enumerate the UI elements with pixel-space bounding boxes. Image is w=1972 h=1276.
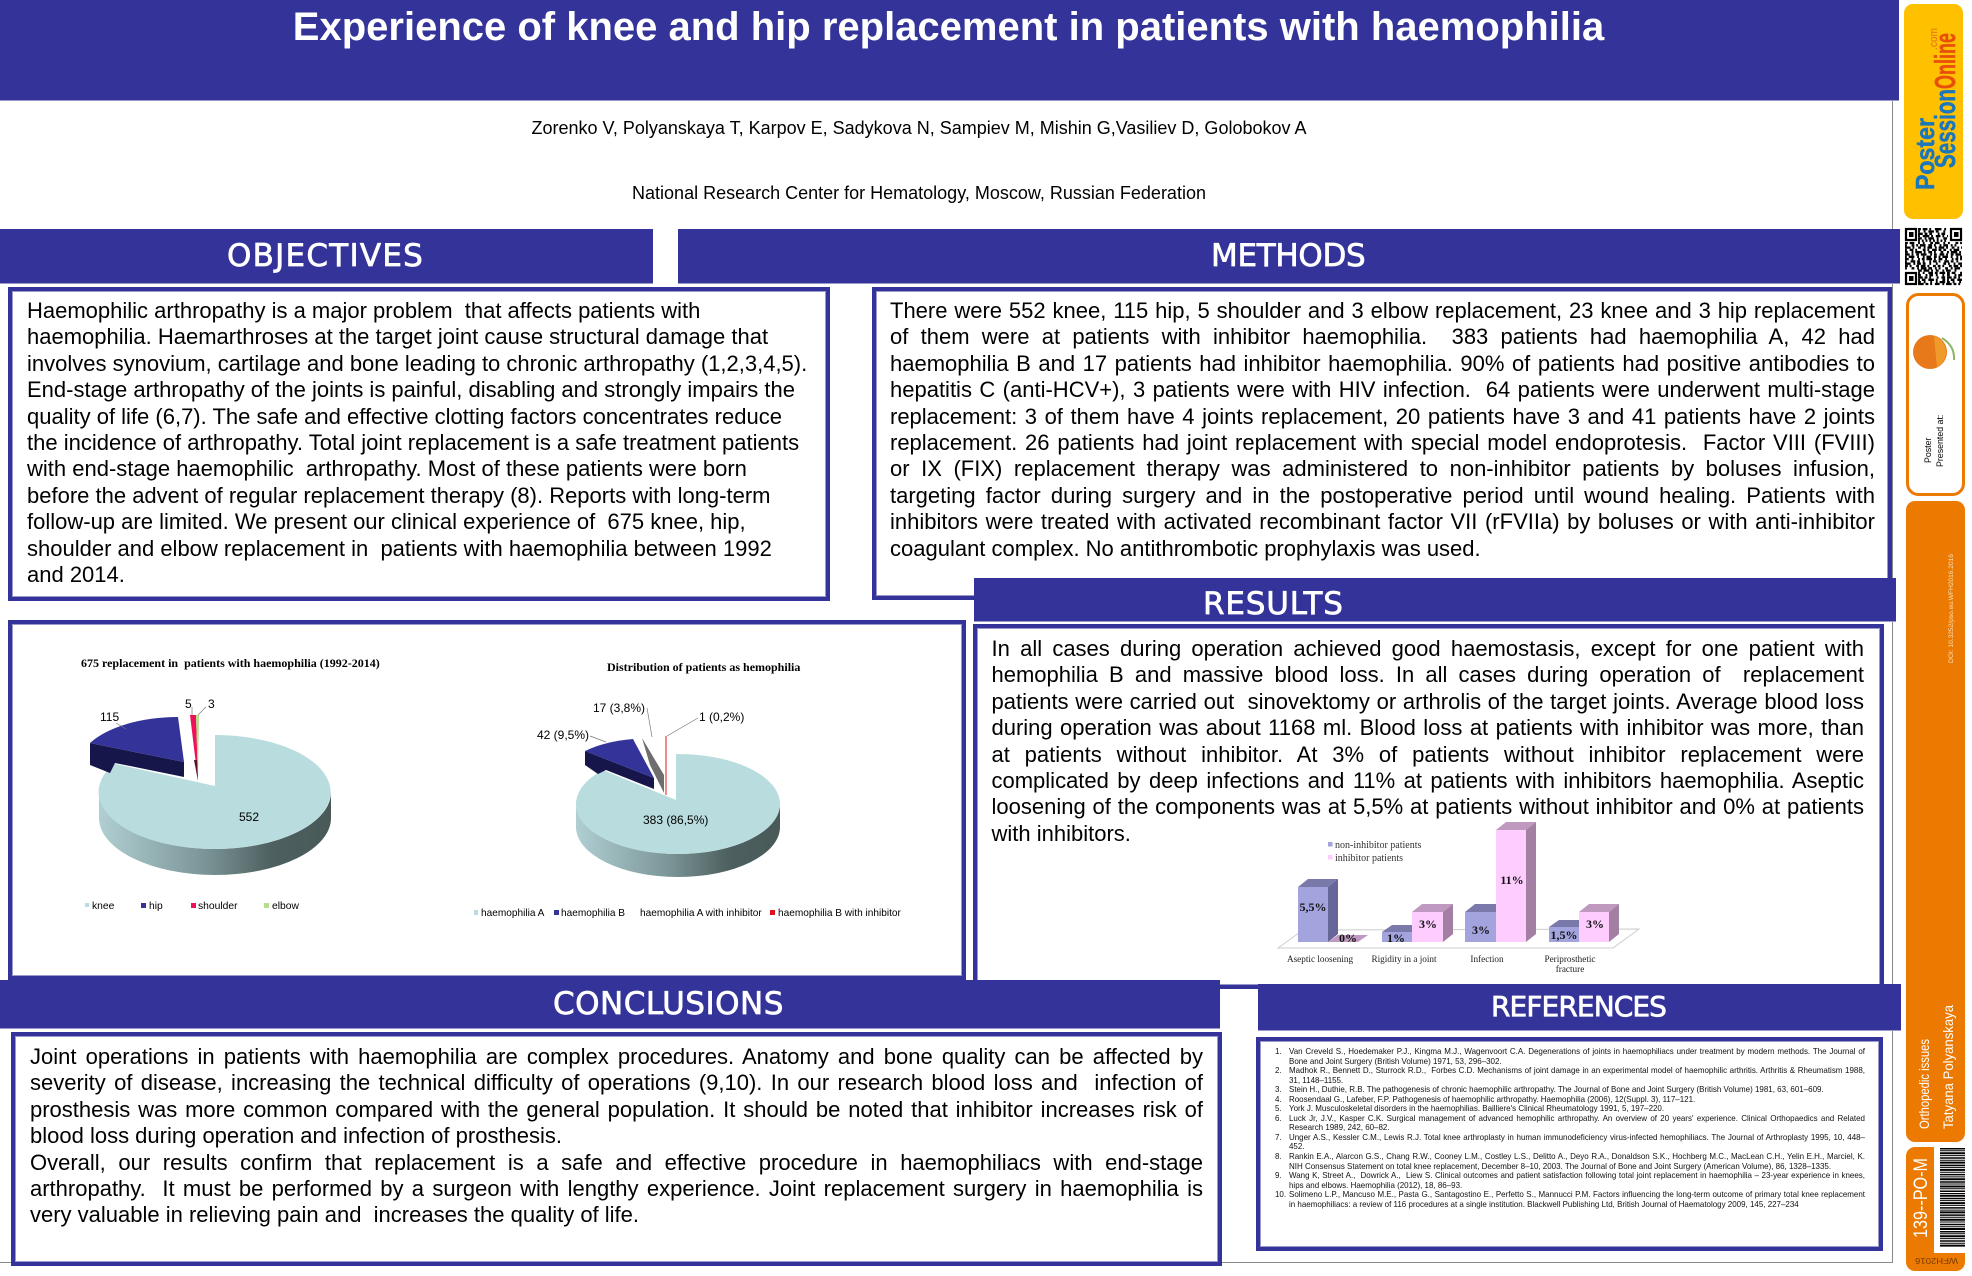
text: references: hips and elbows. Haemophilia (2012), 18, 86–93. [1289,1181,1462,1190]
bar chart: complications: inhibitor patients [1335,853,1403,864]
text: references: 452. [1289,1142,1305,1151]
pie chart: replacements: 552 [239,810,259,824]
sidebar: poster id and barcode: WFH2016 [1915,1256,1958,1266]
pie chart: replacements: 675 replacement in patients with haemophilia (1992-2014) [81,656,380,670]
panel: objectives [8,287,830,601]
text: 1. [1275,1047,1282,1056]
bar chart: complications: Rigidity in a joint [1371,954,1437,964]
text: methods: hepatitis C (anti-HCV+), 3 patients were with HIV infection. 64 patients were underwent multi-stage [890,377,1875,402]
pie chart: distribution: haemophilia B with inhibitor [778,908,902,919]
text: references: Bone and Joint Surgery (British Volume) 1971, 53, 296–302. [1289,1057,1502,1066]
heading: conclusions: CONCLUSIONS [553,986,784,1022]
heading bar: objectives [0,229,653,283]
sidebar: poster session online logo: Session [1930,89,1962,168]
bar chart: complications: Periprosthetic [1544,954,1596,964]
bar chart: complications: Infection [1470,954,1504,964]
bar chart: complications: 1,5% [1550,928,1578,942]
text: 3. [1275,1085,1282,1094]
pie chart: distribution: 17 (3,8%) [593,701,645,715]
text: conclusions [30,1044,1204,1227]
text: conclusions: arthropathy. It must be performed by a surgeon with lengthy experience. Joint replacement surgery in haemophilia is [30,1176,1203,1201]
heading bar: results [974,578,1896,621]
text: references: Research 1989, 242, 60–82. [1289,1123,1390,1132]
text: references: Van Creveld S., Hoedemaker P.J., Kingma M.J., Wagenvoort C.A. Degenerations of joints in haemophiliacs under treatment by modern methods. The Journal of [1289,1047,1865,1056]
text: references: York J. Musculoskeletal disorders in the haemophilias. Bailliere's Clinical Rheumatology 1991, 5, 197–220. [1289,1104,1664,1113]
bar chart: complications: non-inhibitor patients [1335,840,1421,851]
text: references: Wang K, Street A., Dowrick A., Liew S. Clinical outcomes and patient satisfaction following total joint replacement in haemophilia – 23-year experience in knees, [1289,1171,1865,1180]
text: results: complicated by deep infections and 11% at patients with inhibitors haemophilia. Aseptic [992,768,1864,793]
affiliation: National Research Center for Hematology, Moscow, Russian Federation [632,183,1206,203]
pie chart: distribution: haemophilia B [561,908,625,919]
pie chart: replacements: elbow [272,901,299,912]
text: objectives: follow-up are limited. We present our clinical experience of 675 knee, hip, [27,509,746,534]
pie chart: replacements: knee [92,901,115,912]
heading: references: REFERENCES [1491,990,1666,1023]
text: references: Solimeno L.P., Mancuso M.E., Pasta G., Santagostino E., Perfetto S., Mannucci P.M. Factors influencing the long-term outcome of primary total knee replacement [1289,1190,1865,1199]
text: conclusions: prosthesis was more common compared with the general population. It should be noted that inhibitor increases risk of [30,1097,1203,1122]
sidebar: poster session online logo: Online [1930,33,1962,89]
text: methods [890,298,1875,561]
text: conclusions: Overall, our results confirm that replacement is a safe and effective procedure in haemophiliacs with end-stage [30,1150,1203,1175]
text: objectives: quality of life (6,7). The safe and effective clotting factors concentrates reduce [27,404,782,429]
bar chart: complications: 1% [1387,931,1405,945]
text: references: NIH Consensus Statement on total knee replacement, December 8–10, 2003. The Journal of Bone and Joint Surgery (American Volume), 86, 1328–1335. [1289,1162,1831,1171]
pie chart: distribution: haemophilia A with inhibitor [640,908,762,919]
text: references: Madhok R., Bennett D., Sturrock R.D., Forbes C.D. Mechanisms of joint damage in an experimental model of haemophilic arthritis. Arthritis & Rheumatism 1988, [1289,1066,1865,1075]
text: methods: There were 552 knee, 115 hip, 5 shoulder and 3 elbow replacement, 23 knee and 3 hip replacement [890,298,1875,323]
pie chart: distribution: haemophilia A [481,908,545,919]
sidebar: poster id and barcode: 139--PO-M [1911,1158,1932,1238]
text: objectives: haemophilia. Haemarthroses at the target joint cause structural damage that [27,324,768,349]
text: 9. [1275,1171,1282,1180]
text: objectives [27,298,807,587]
text: 2. [1275,1066,1282,1075]
pie chart: replacements: hip [149,901,163,912]
bar chart: complications: 0% [1339,931,1357,945]
panel: results [973,624,1884,989]
text: results: at patients without inhibitor. At 3% of patients without inhibitor replacement were [992,742,1864,767]
text: methods: haemophilia B and 17 patients had inhibitor haemophilia. 90% of patients had positive antibodies to [890,351,1875,376]
text: objectives: End-stage arthropathy of the joints is painful, disabling and strongly impairs the [27,377,795,402]
bar chart: complications: 3% [1419,917,1437,931]
bar chart: complications: fracture [1556,964,1584,974]
text: methods: or IX (FIX) replacement therapy was administered to non-inhibitor patients by boluses infusion, [890,456,1875,481]
text: objectives: shoulder and elbow replacement in patients with haemophilia between 1992 [27,536,772,561]
panel: charts [8,620,966,980]
pie chart: distribution: 383 (86,5%) [643,813,708,827]
text: 8. [1275,1152,1282,1161]
text: methods: inhibitors were treated with activated recombinant factor VII (rFVIIa) by boluses or with anti-inhibitor [890,509,1875,534]
text: 10. [1275,1190,1286,1199]
text: references [1275,1047,1865,1209]
heading bar: references [1258,984,1901,1030]
text: results: with inhibitors. [992,821,1131,846]
text: results: during operation was about 1168 ml. Blood loss at patients with inhibitor was more, than [992,715,1864,740]
bar chart: complications: Aseptic loosening [1287,954,1353,964]
sidebar: orange session bar: Orthopedic issues [1917,1039,1932,1129]
text: objectives: Haemophilic arthropathy is a major problem that affects patients with [27,298,700,323]
heading: methods: METHODS [1211,238,1365,274]
pie chart: distribution: 42 (9,5%) [537,728,589,742]
text: methods: of them were at patients with inhibitor haemophilia. 383 patients had haemophilia A, 42 had [890,324,1875,349]
title banner [0,0,1899,100]
pie chart: replacements: shoulder [198,901,238,912]
text: conclusions: blood loss during operation and infection of prosthesis. [30,1123,562,1148]
sidebar: orange session bar: DOI: 10.3252/pso.eu.WFH2016.2016 [1948,554,1955,663]
authors: Zorenko V, Polyanskaya T, Karpov E, Sadykova N, Sampiev M, Mishin G,Vasiliev D, Golobokov A [531,118,1307,138]
pie chart: replacements: 115 [100,710,119,724]
text: methods: targeting factor during surgery and in the postoperative period until wound healing. Patients with [890,483,1875,508]
text: results: patients were carried out sinovektomy or arthrolis of the target joints. Average blood loss [992,689,1864,714]
text: conclusions: very valuable in relieving pain and increases the quality of life. [30,1202,639,1227]
text: objectives: with end-stage haemophilic arthropathy. Most of these patients were born [27,456,747,481]
pie chart: distribution: 1 (0,2%) [699,710,744,724]
text: methods: replacement: 3 of them have 4 joints replacement, 20 patients have 3 and 41 patients have 2 joints [890,404,1875,429]
text: references: Rankin E.A., Alarcon G.S., Chang R.W., Cooney L.M., Costley L.S., Delitto A., Deyo R.A., Donaldson S.K., Hochberg M.C., MacLean C.H., Yelin E.H., Marciel, K. [1289,1152,1865,1161]
text: references: Roosendaal G., Lafeber, F.P. Pathogenesis of haemophilic arthropathy. Haemophilia (2006), 12(Suppl. 3), 117–121. [1289,1095,1695,1104]
sidebar: presented at card: Presented at: [1935,415,1945,467]
sidebar: poster session online logo: Poster [1910,118,1940,190]
text: results: loosening of the components was at 5,5% at patients without inhibitor and 0% at patients [992,794,1864,819]
text: 6. [1275,1114,1282,1123]
text: results: hemophilia B and massive blood loss. In all cases during operation of replacement [992,662,1864,687]
text: methods: coagulant complex. No antithrombotic prophylaxis was used. [890,536,1481,561]
text: results [992,636,1864,846]
text: 7. [1275,1133,1282,1142]
text: references: Unger A.S., Kessler C.M., Lewis R.J. Total knee arthroplasty in human immunodeficiency virus-infected hemophiliacs. The Journal of Arthroplasty 1995, 10, 448– [1289,1133,1865,1142]
text: objectives: and 2014. [27,562,125,587]
bar chart: complications: 11% [1500,873,1524,887]
text: objectives: the incidence of arthropathy. Total joint replacement is a safe treatment patients [27,430,799,455]
heading bar: conclusions [0,980,1220,1028]
title: Experience of knee and hip replacement in patients with haemophilia [293,5,1604,49]
pie chart: distribution: Distribution of patients as hemophilia [607,660,800,674]
text: conclusions: Joint operations in patients with haemophilia are complex procedures. Anatomy and bone quality can be affected by [30,1044,1203,1069]
panel: references [1256,1037,1883,1251]
bar chart: complications: 5,5% [1300,900,1326,914]
text: objectives: before the advent of regular replacement therapy (8). Reports with long-term [27,483,770,508]
panel: methods [872,287,1892,600]
bar chart: complications: 3% [1472,923,1490,937]
heading bar: methods [678,229,1900,283]
text: 5. [1275,1104,1282,1113]
text: results: In all cases during operation achieved good haemostasis, except for one patient with [992,636,1864,661]
text: references: Luck Jr, J.V., Kasper C.K. Surgical management of advanced hemophilic arthropathy. An overview of 20 years' experience. Clinical Orthopaedics and Related [1289,1114,1865,1123]
sidebar: orange session bar: Tatyana Polyanskaya [1941,1005,1956,1129]
sidebar: poster session online logo: .com [1928,28,1940,50]
sidebar: presented at card: Poster [1923,438,1933,463]
pie chart: replacements: 5 [185,697,192,711]
text: 4. [1275,1095,1282,1104]
pie chart: replacements: 3 [208,697,215,711]
text: methods: replacement. 26 patients had joint replacement with special model endoprotesis. Factor VIII (FVIII) [890,430,1875,455]
text: objectives: involves synovium, cartilage and bone leading to chronic arthropathy (1,2,3,4,5). [27,351,807,376]
heading: objectives: OBJECTIVES [227,238,424,274]
text: references: Stein H., Duthie, R.B. The pathogenesis of chronic haemophilic arthropathy. The Journal of Bone and Joint Surgery (British Volume) 1981, 63, 601–609. [1289,1085,1824,1094]
text: references: in haemophiliacs: a review of 116 procedures at a single institution. Blackwell Publishing Ltd, British Journal of Haematology 2009, 145, 227–234 [1289,1200,1799,1209]
text: conclusions: severity of disease, increasing the technical difficulty of operations (9,10). In our research blood loss and infection of [30,1070,1203,1095]
bar chart: complications: 3% [1586,917,1604,931]
text: references: 31, 1148–1155. [1289,1076,1343,1085]
heading: results: RESULTS [1203,586,1344,622]
panel: conclusions [11,1032,1222,1266]
